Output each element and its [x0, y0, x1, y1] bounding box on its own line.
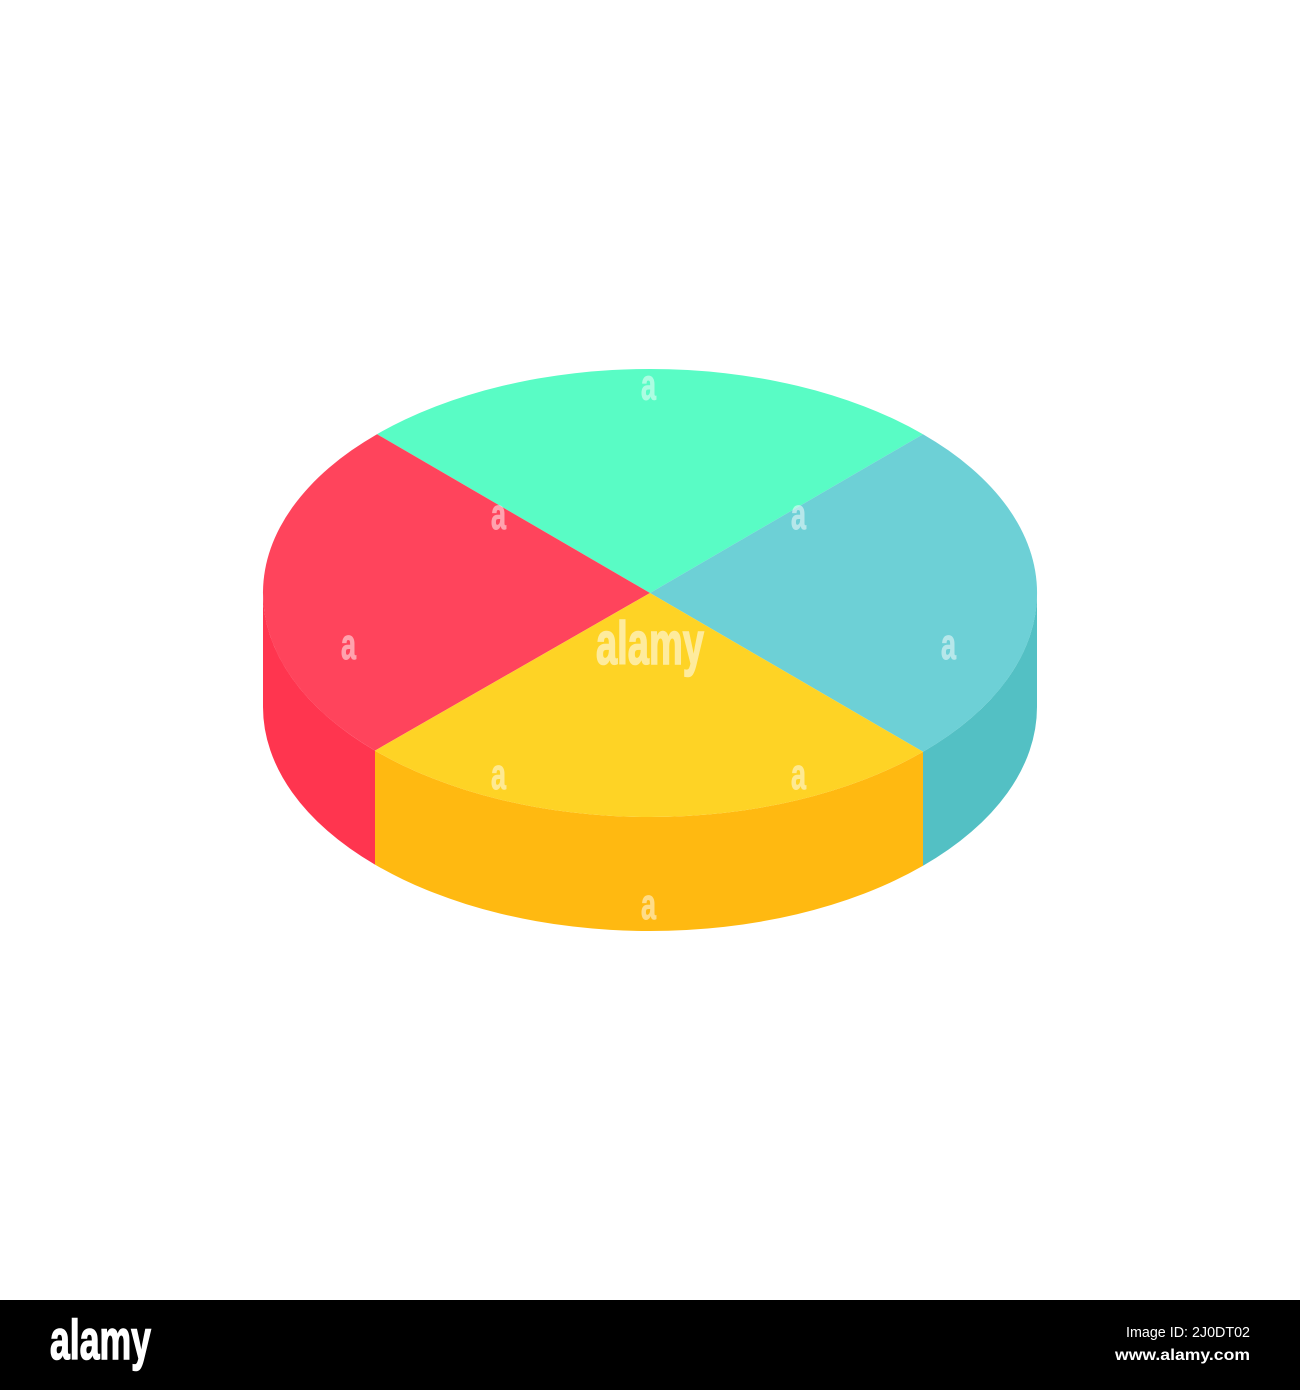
footer bar	[0, 1300, 1300, 1390]
side wall: teal segment	[923, 593, 1037, 866]
isometric pie chart	[263, 369, 1037, 931]
watermark marks: a	[491, 750, 506, 799]
footer logo: alamy	[50, 1308, 151, 1371]
side wall: yellow segment	[375, 751, 923, 931]
watermark marks: a	[491, 490, 506, 539]
watermark marks: a	[791, 750, 806, 799]
image id: Image ID: 2J0DT02	[1126, 1325, 1250, 1341]
watermark marks: a	[341, 620, 356, 669]
website: www.alamy.com	[1114, 1347, 1250, 1364]
watermark marks	[341, 360, 956, 929]
watermark marks: a	[641, 880, 656, 929]
top slice: red	[263, 434, 650, 751]
watermark marks: a	[791, 490, 806, 539]
top slice: teal	[650, 434, 1037, 752]
watermark marks: a	[941, 620, 956, 669]
center watermark: alamy	[596, 610, 704, 677]
side wall: red segment	[263, 593, 375, 865]
top slice: yellow	[375, 593, 923, 817]
top slice: green	[377, 369, 923, 593]
watermark marks: a	[641, 360, 656, 410]
